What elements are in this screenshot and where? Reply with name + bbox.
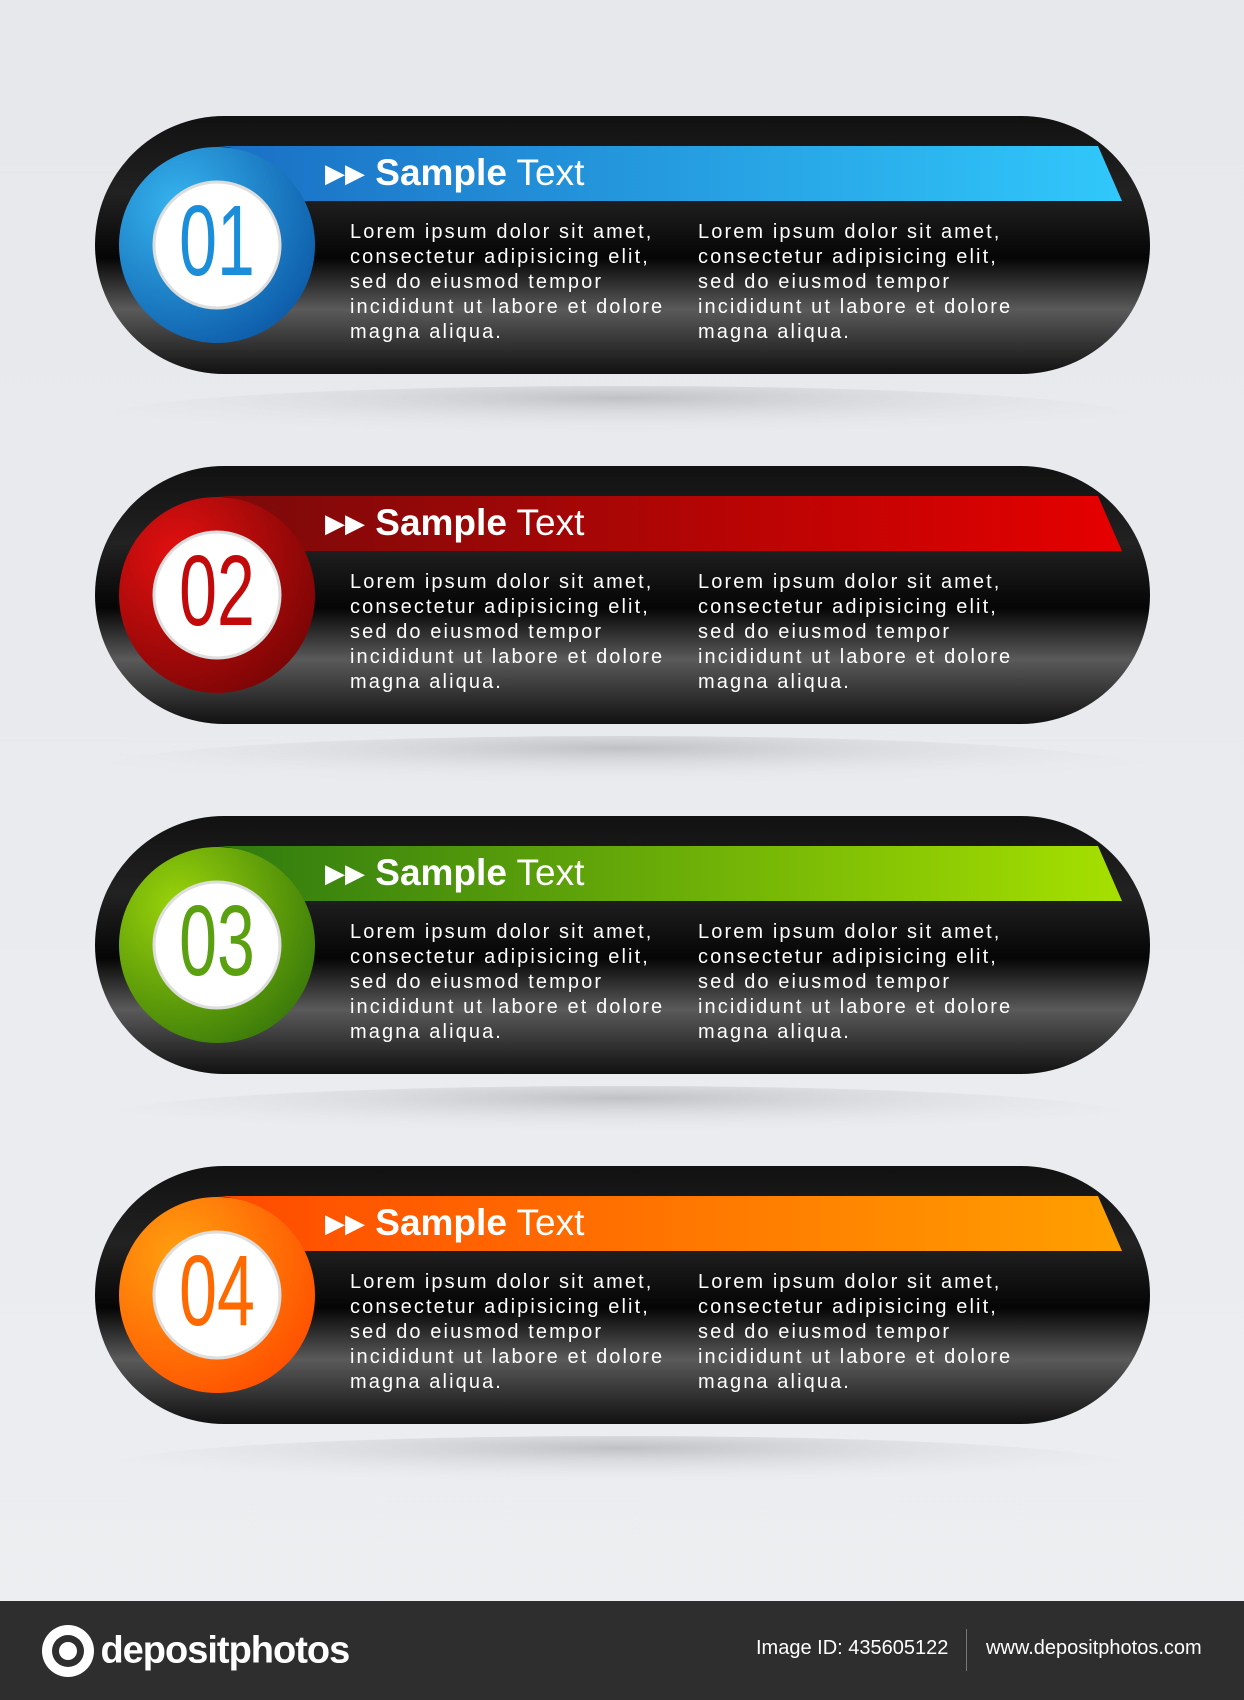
- text block left: consectetur adipisicing elit,: [350, 946, 650, 968]
- text block left: [350, 221, 664, 343]
- text block right: Lorem ipsum dolor sit amet,: [698, 921, 1001, 943]
- text block right: consectetur adipisicing elit,: [698, 946, 998, 968]
- text block left: magna aliqua.: [350, 671, 503, 693]
- text block right: magna aliqua.: [698, 671, 851, 693]
- text block right: Lorem ipsum dolor sit amet,: [698, 221, 1001, 243]
- text block left: Lorem ipsum dolor sit amet,: [350, 1271, 653, 1293]
- text block right: sed do eiusmod tempor: [698, 1321, 951, 1343]
- heading: ▶▶ Sample Text: [325, 152, 584, 193]
- text block left: incididunt ut labore et dolore: [350, 296, 664, 318]
- text block left: consectetur adipisicing elit,: [350, 246, 650, 268]
- text block right: magna aliqua.: [698, 1021, 851, 1043]
- text block right: consectetur adipisicing elit,: [698, 1296, 998, 1318]
- number badge: 02: [179, 535, 255, 647]
- text block right: [698, 221, 1012, 343]
- text block left: incididunt ut labore et dolore: [350, 996, 664, 1018]
- text block right: [698, 571, 1012, 693]
- text block left: sed do eiusmod tempor: [350, 621, 603, 643]
- text block left: [350, 1271, 664, 1393]
- number badge: 01: [179, 185, 255, 297]
- text block right: consectetur adipisicing elit,: [698, 596, 998, 618]
- text block right: magna aliqua.: [698, 1371, 851, 1393]
- text block left: Lorem ipsum dolor sit amet,: [350, 921, 653, 943]
- text block right: incididunt ut labore et dolore: [698, 996, 1012, 1018]
- panel: 03 green: [95, 816, 1150, 1118]
- text block right: sed do eiusmod tempor: [698, 621, 951, 643]
- text block right: incididunt ut labore et dolore: [698, 646, 1012, 668]
- panel: 04 orange: [95, 1166, 1150, 1470]
- text block left: consectetur adipisicing elit,: [350, 596, 650, 618]
- logo: [42, 1625, 349, 1677]
- text block left: incididunt ut labore et dolore: [350, 1346, 664, 1368]
- panel: 02 red: [95, 466, 1150, 768]
- text block left: sed do eiusmod tempor: [350, 1321, 603, 1343]
- number badge: 04: [179, 1235, 255, 1347]
- text block right: Lorem ipsum dolor sit amet,: [698, 571, 1001, 593]
- text block left: magna aliqua.: [350, 1371, 503, 1393]
- text block right: sed do eiusmod tempor: [698, 271, 951, 293]
- text block left: consectetur adipisicing elit,: [350, 1296, 650, 1318]
- heading: ▶▶ Sample Text: [325, 1202, 584, 1243]
- text block right: incididunt ut labore et dolore: [698, 1346, 1012, 1368]
- text block left: [350, 571, 664, 693]
- text block left: Lorem ipsum dolor sit amet,: [350, 571, 653, 593]
- text block left: sed do eiusmod tempor: [350, 971, 603, 993]
- text block left: [350, 921, 664, 1043]
- text block right: incididunt ut labore et dolore: [698, 296, 1012, 318]
- text block right: sed do eiusmod tempor: [698, 971, 951, 993]
- footer: [0, 1601, 1244, 1700]
- image id: Image ID: 435605122: [756, 1637, 948, 1659]
- website: www.depositphotos.com: [986, 1637, 1202, 1659]
- text block left: magna aliqua.: [350, 321, 503, 343]
- text block left: incididunt ut labore et dolore: [350, 646, 664, 668]
- heading: ▶▶ Sample Text: [325, 852, 584, 893]
- panel: 01 blue: [95, 116, 1150, 418]
- text block right: Lorem ipsum dolor sit amet,: [698, 1271, 1001, 1293]
- text block left: magna aliqua.: [350, 1021, 503, 1043]
- text block right: [698, 1271, 1012, 1393]
- number badge: 03: [179, 885, 255, 997]
- heading: ▶▶ Sample Text: [325, 502, 584, 543]
- text block left: Lorem ipsum dolor sit amet,: [350, 221, 653, 243]
- text block right: consectetur adipisicing elit,: [698, 246, 998, 268]
- text block right: [698, 921, 1012, 1043]
- text block left: sed do eiusmod tempor: [350, 271, 603, 293]
- text block right: magna aliqua.: [698, 321, 851, 343]
- logo: depositphotos: [100, 1630, 349, 1672]
